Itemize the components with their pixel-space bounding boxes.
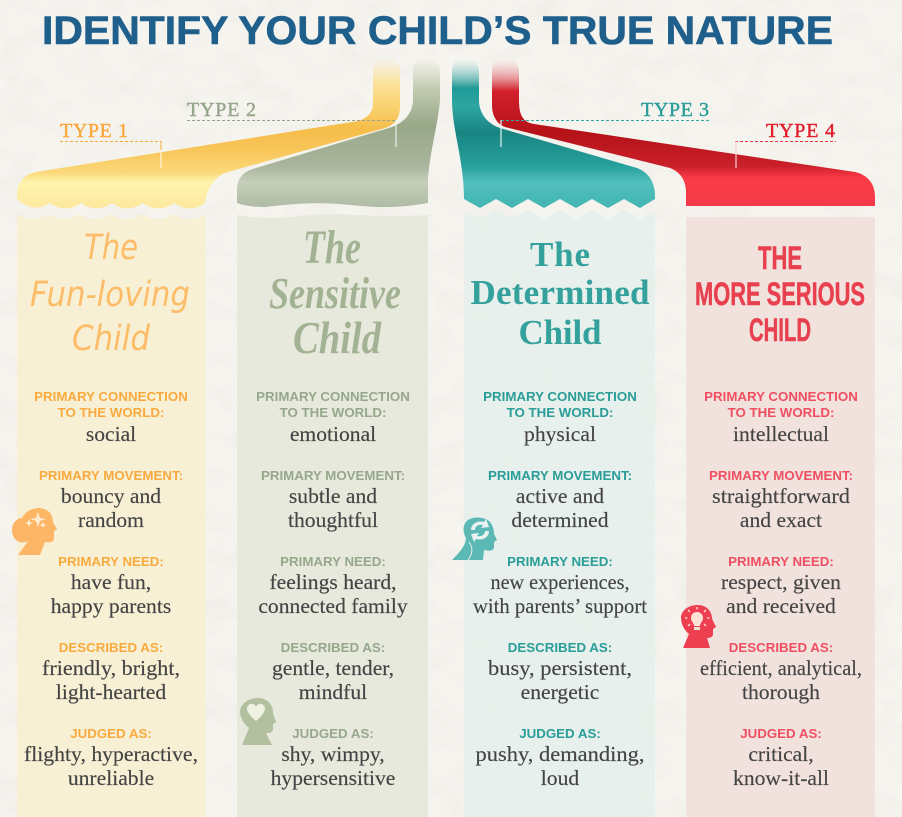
judged as: JUDGED AS: [292,726,374,741]
icon: head with arrows [452,517,497,560]
judged as: JUDGED AS: [519,726,601,741]
judged as [733,726,829,790]
connection: social [86,422,136,446]
judged as [271,726,395,790]
need: new experiences, [490,570,630,594]
connection [256,389,410,446]
connection: PRIMARY CONNECTION [256,389,410,404]
heading: the sensitive child: The [303,221,361,274]
judged as: shy, wimpy, [281,742,385,766]
heading: the fun-loving child [30,228,190,359]
judged as: JUDGED AS: [740,726,822,741]
described as [272,640,394,704]
described as: light-hearted [56,680,166,704]
judged as: unreliable [68,766,154,790]
panel: type 3 background column [464,210,655,817]
need: happy parents [51,594,171,618]
title: IDENTIFY YOUR CHILD’S TRUE NATURE [42,9,833,53]
need: with parents’ support [473,594,647,618]
connection: PRIMARY CONNECTION [483,389,637,404]
movement: and exact [740,508,822,532]
movement [488,468,632,532]
need: feelings heard, [269,570,397,594]
described as: DESCRIBED AS: [59,640,163,655]
movement: active and [516,484,604,508]
connection [483,389,637,446]
need: connected family [258,594,408,618]
column: the sensitive child [256,221,410,790]
described as: energetic [521,680,599,704]
need: respect, given [721,570,841,594]
column: the determined child [470,235,650,790]
connection: TO THE WORLD: [728,405,834,420]
panel: type 1 background column [17,214,206,817]
described as: gentle, tender, [272,656,394,680]
movement: bouncy and [61,484,161,508]
need: have fun, [71,570,151,594]
judged as: loud [541,766,579,790]
heading: the determined child: The [530,235,590,274]
connection: TO THE WORLD: [507,405,613,420]
heading: the fun-loving child: The [84,228,138,268]
described as [700,640,862,704]
need [721,554,841,618]
described as: busy, persistent, [488,656,632,680]
described as: DESCRIBED AS: [729,640,833,655]
movement [261,468,405,532]
label: type 1 with leader: TYPE 1 [60,120,128,142]
heading: the fun-loving child: Child [72,319,151,359]
connection: PRIMARY CONNECTION [34,389,188,404]
connection: physical [524,422,596,446]
judged as: JUDGED AS: [70,726,152,741]
connection: emotional [290,422,376,446]
label: type 2 with leader: TYPE 2 [187,99,256,121]
described as: DESCRIBED AS: [508,640,612,655]
heading: the sensitive child [269,221,401,363]
need [473,554,647,618]
heading: the determined child: Child [518,313,602,352]
heading: the sensitive child: Child [293,312,382,363]
panel: type 2 background column [237,214,428,817]
heading: the fun-loving child: Fun-loving [30,275,190,315]
need: PRIMARY NEED: [507,554,613,569]
label: type 1 with leader [60,120,161,168]
judged as: critical, [748,742,814,766]
connection: TO THE WORLD: [280,405,386,420]
heading: the more serious child [695,240,865,348]
described as: friendly, bright, [42,656,180,680]
described as [42,640,180,704]
ribbon: type 3 teal awning [452,58,655,208]
movement: random [78,508,144,532]
judged as: pushy, demanding, [476,742,644,766]
ribbon: type 4 red awning [492,58,875,206]
judged as: know-it-all [733,766,829,790]
heading: the determined child [470,235,650,352]
described as: mindful [299,680,367,704]
described as: thorough [742,680,820,704]
movement [709,468,853,532]
heading: the determined child: Determined [470,273,650,312]
judged as: flighty, hyperactive, [24,742,198,766]
movement: straightforward [712,484,850,508]
column: the fun-loving child [24,228,198,790]
connection: TO THE WORLD: [58,405,164,420]
judged as [24,726,198,790]
need: PRIMARY NEED: [58,554,164,569]
label: type 4 with leader: TYPE 4 [766,120,835,142]
movement [39,468,183,532]
movement: subtle and [289,484,377,508]
movement: PRIMARY MOVEMENT: [261,468,405,483]
described as: efficient, analytical, [700,656,862,680]
ribbon: type 1 yellow awning [17,58,400,208]
icon: head with light bulb [681,605,716,648]
ribbon: type 2 green awning [237,58,440,207]
heading: the more serious child: CHILD [749,312,811,348]
movement: PRIMARY MOVEMENT: [709,468,853,483]
movement: determined [511,508,609,532]
need: PRIMARY NEED: [280,554,386,569]
connection: PRIMARY CONNECTION [704,389,858,404]
need [51,554,171,618]
icon: head with heart [240,698,276,745]
judged as [476,726,644,790]
described as [488,640,632,704]
described as: DESCRIBED AS: [281,640,385,655]
need [258,554,408,618]
judged as: hypersensitive [271,766,395,790]
heading: the more serious child: THE [758,240,802,276]
heading: the sensitive child: Sensitive [269,269,401,318]
label: type 3 with leader: TYPE 3 [641,99,709,121]
connection [34,389,188,446]
icon: head with stars [12,508,57,555]
need: and received [726,594,836,618]
label: type 4 with leader [735,120,836,168]
panel: type 4 background column [686,217,875,817]
movement: PRIMARY MOVEMENT: [488,468,632,483]
connection: intellectual [733,422,829,446]
movement: PRIMARY MOVEMENT: [39,468,183,483]
connection [704,389,858,446]
need: PRIMARY NEED: [728,554,834,569]
column: the more serious child [695,240,865,790]
movement: thoughtful [288,508,378,532]
